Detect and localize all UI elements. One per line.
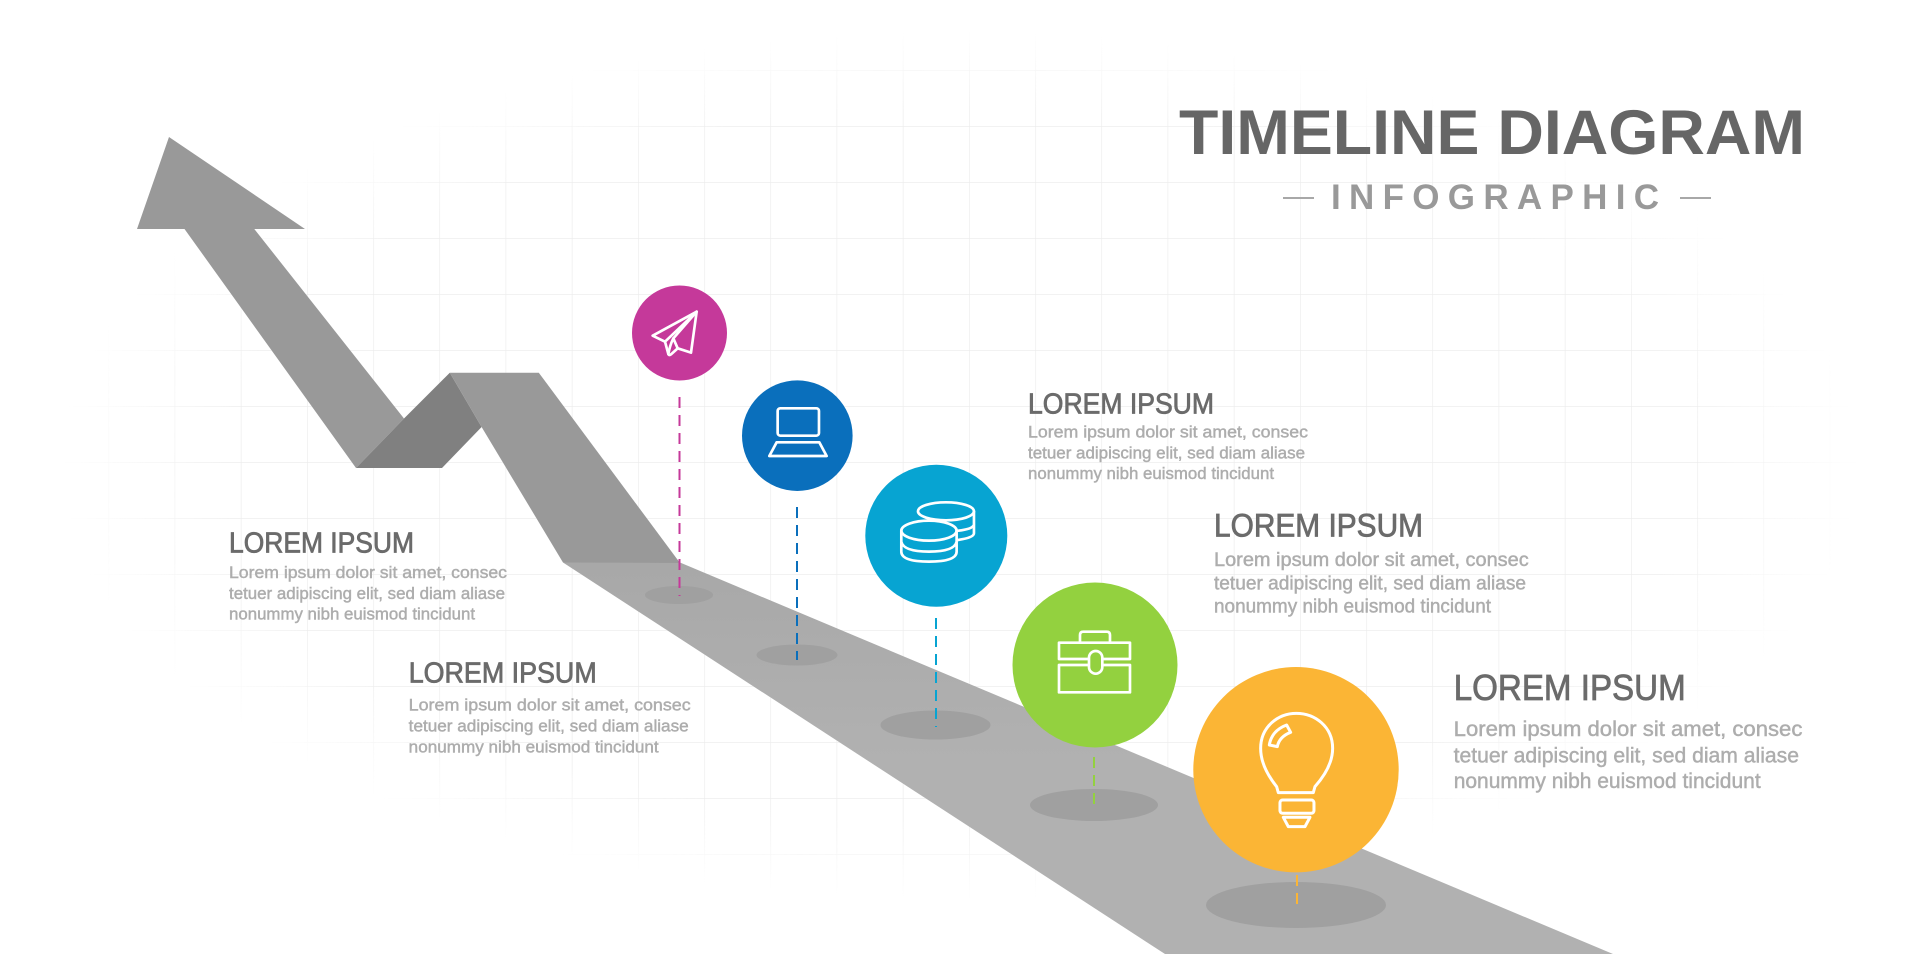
icon: light bulb xyxy=(1261,713,1333,827)
icon: paper plane xyxy=(653,312,697,355)
body text xyxy=(229,563,508,624)
circle xyxy=(1193,667,1399,872)
dashed connector xyxy=(935,618,937,727)
circle xyxy=(632,286,727,380)
heading: LOREM IPSUM xyxy=(1454,667,1686,708)
road: perspective path xyxy=(563,562,1613,954)
body text: tetuer adipiscing elit, sed diam aliase xyxy=(1028,443,1305,462)
step 3: cyan marker xyxy=(865,465,1007,740)
arrow head and upper shaft xyxy=(137,137,404,468)
arrow fold xyxy=(356,373,482,468)
body text: Lorem ipsum dolor sit amet, consec xyxy=(1028,422,1309,441)
step 4: green marker xyxy=(1012,582,1178,821)
text block: center xyxy=(1028,388,1309,483)
icon: laptop xyxy=(769,408,827,456)
dashed connector xyxy=(1296,875,1298,910)
body text xyxy=(1214,550,1529,618)
heading: LOREM IPSUM xyxy=(409,658,597,690)
title block xyxy=(1179,98,1805,217)
circle xyxy=(865,465,1007,607)
body text: Lorem ipsum dolor sit amet, consec xyxy=(229,563,508,582)
body text xyxy=(409,696,691,757)
dashed connector xyxy=(678,397,680,596)
text block: top-left xyxy=(229,528,508,624)
text block: lower-left xyxy=(409,658,691,757)
text block: right bottom xyxy=(1454,667,1802,793)
heading: LOREM IPSUM xyxy=(1028,388,1214,420)
body text: tetuer adipiscing elit, sed diam aliase xyxy=(229,584,505,603)
step 2: blue marker xyxy=(742,380,853,666)
text block: right middle xyxy=(1214,508,1529,618)
arrow lower band xyxy=(450,373,680,563)
body text: Lorem ipsum dolor sit amet, consec xyxy=(409,696,691,715)
icon: briefcase xyxy=(1059,632,1130,692)
main title: TIMELINE DIAGRAM xyxy=(1179,98,1805,168)
dashed connector xyxy=(796,507,798,660)
body text: Lorem ipsum dolor sit amet, consec xyxy=(1454,718,1802,741)
step 5: orange marker xyxy=(1193,667,1399,928)
step 1: pink marker xyxy=(632,286,727,604)
body text: tetuer adipiscing elit, sed diam aliase xyxy=(1454,744,1799,767)
shadow ellipse xyxy=(645,586,713,604)
icon: coins xyxy=(901,502,974,562)
circle xyxy=(1012,582,1178,748)
heading: LOREM IPSUM xyxy=(1214,508,1423,544)
shadow ellipse xyxy=(1030,789,1158,821)
body text: nonummy nibh euismod tincidunt xyxy=(1214,597,1492,618)
circle xyxy=(742,380,853,491)
arrow: folded grey arrow xyxy=(137,137,680,563)
body text: nonummy nibh euismod tincidunt xyxy=(229,604,475,624)
shadow ellipse xyxy=(756,644,838,666)
body text: tetuer adipiscing elit, sed diam aliase xyxy=(1214,573,1526,594)
dashed connector xyxy=(1093,757,1095,808)
body text: nonummy nibh euismod tincidunt xyxy=(409,738,659,757)
body text: nonummy nibh euismod tincidunt xyxy=(1028,464,1274,483)
shadow ellipse xyxy=(880,710,990,740)
body text: tetuer adipiscing elit, sed diam aliase xyxy=(409,717,689,736)
body text xyxy=(1028,422,1309,483)
body text xyxy=(1454,718,1802,793)
shadow ellipse xyxy=(1206,882,1386,928)
body text: nonummy nibh euismod tincidunt xyxy=(1454,770,1761,793)
subtitle: INFOGRAPHIC xyxy=(1331,178,1659,217)
heading: LOREM IPSUM xyxy=(229,528,414,560)
body text: Lorem ipsum dolor sit amet, consec xyxy=(1214,550,1529,571)
